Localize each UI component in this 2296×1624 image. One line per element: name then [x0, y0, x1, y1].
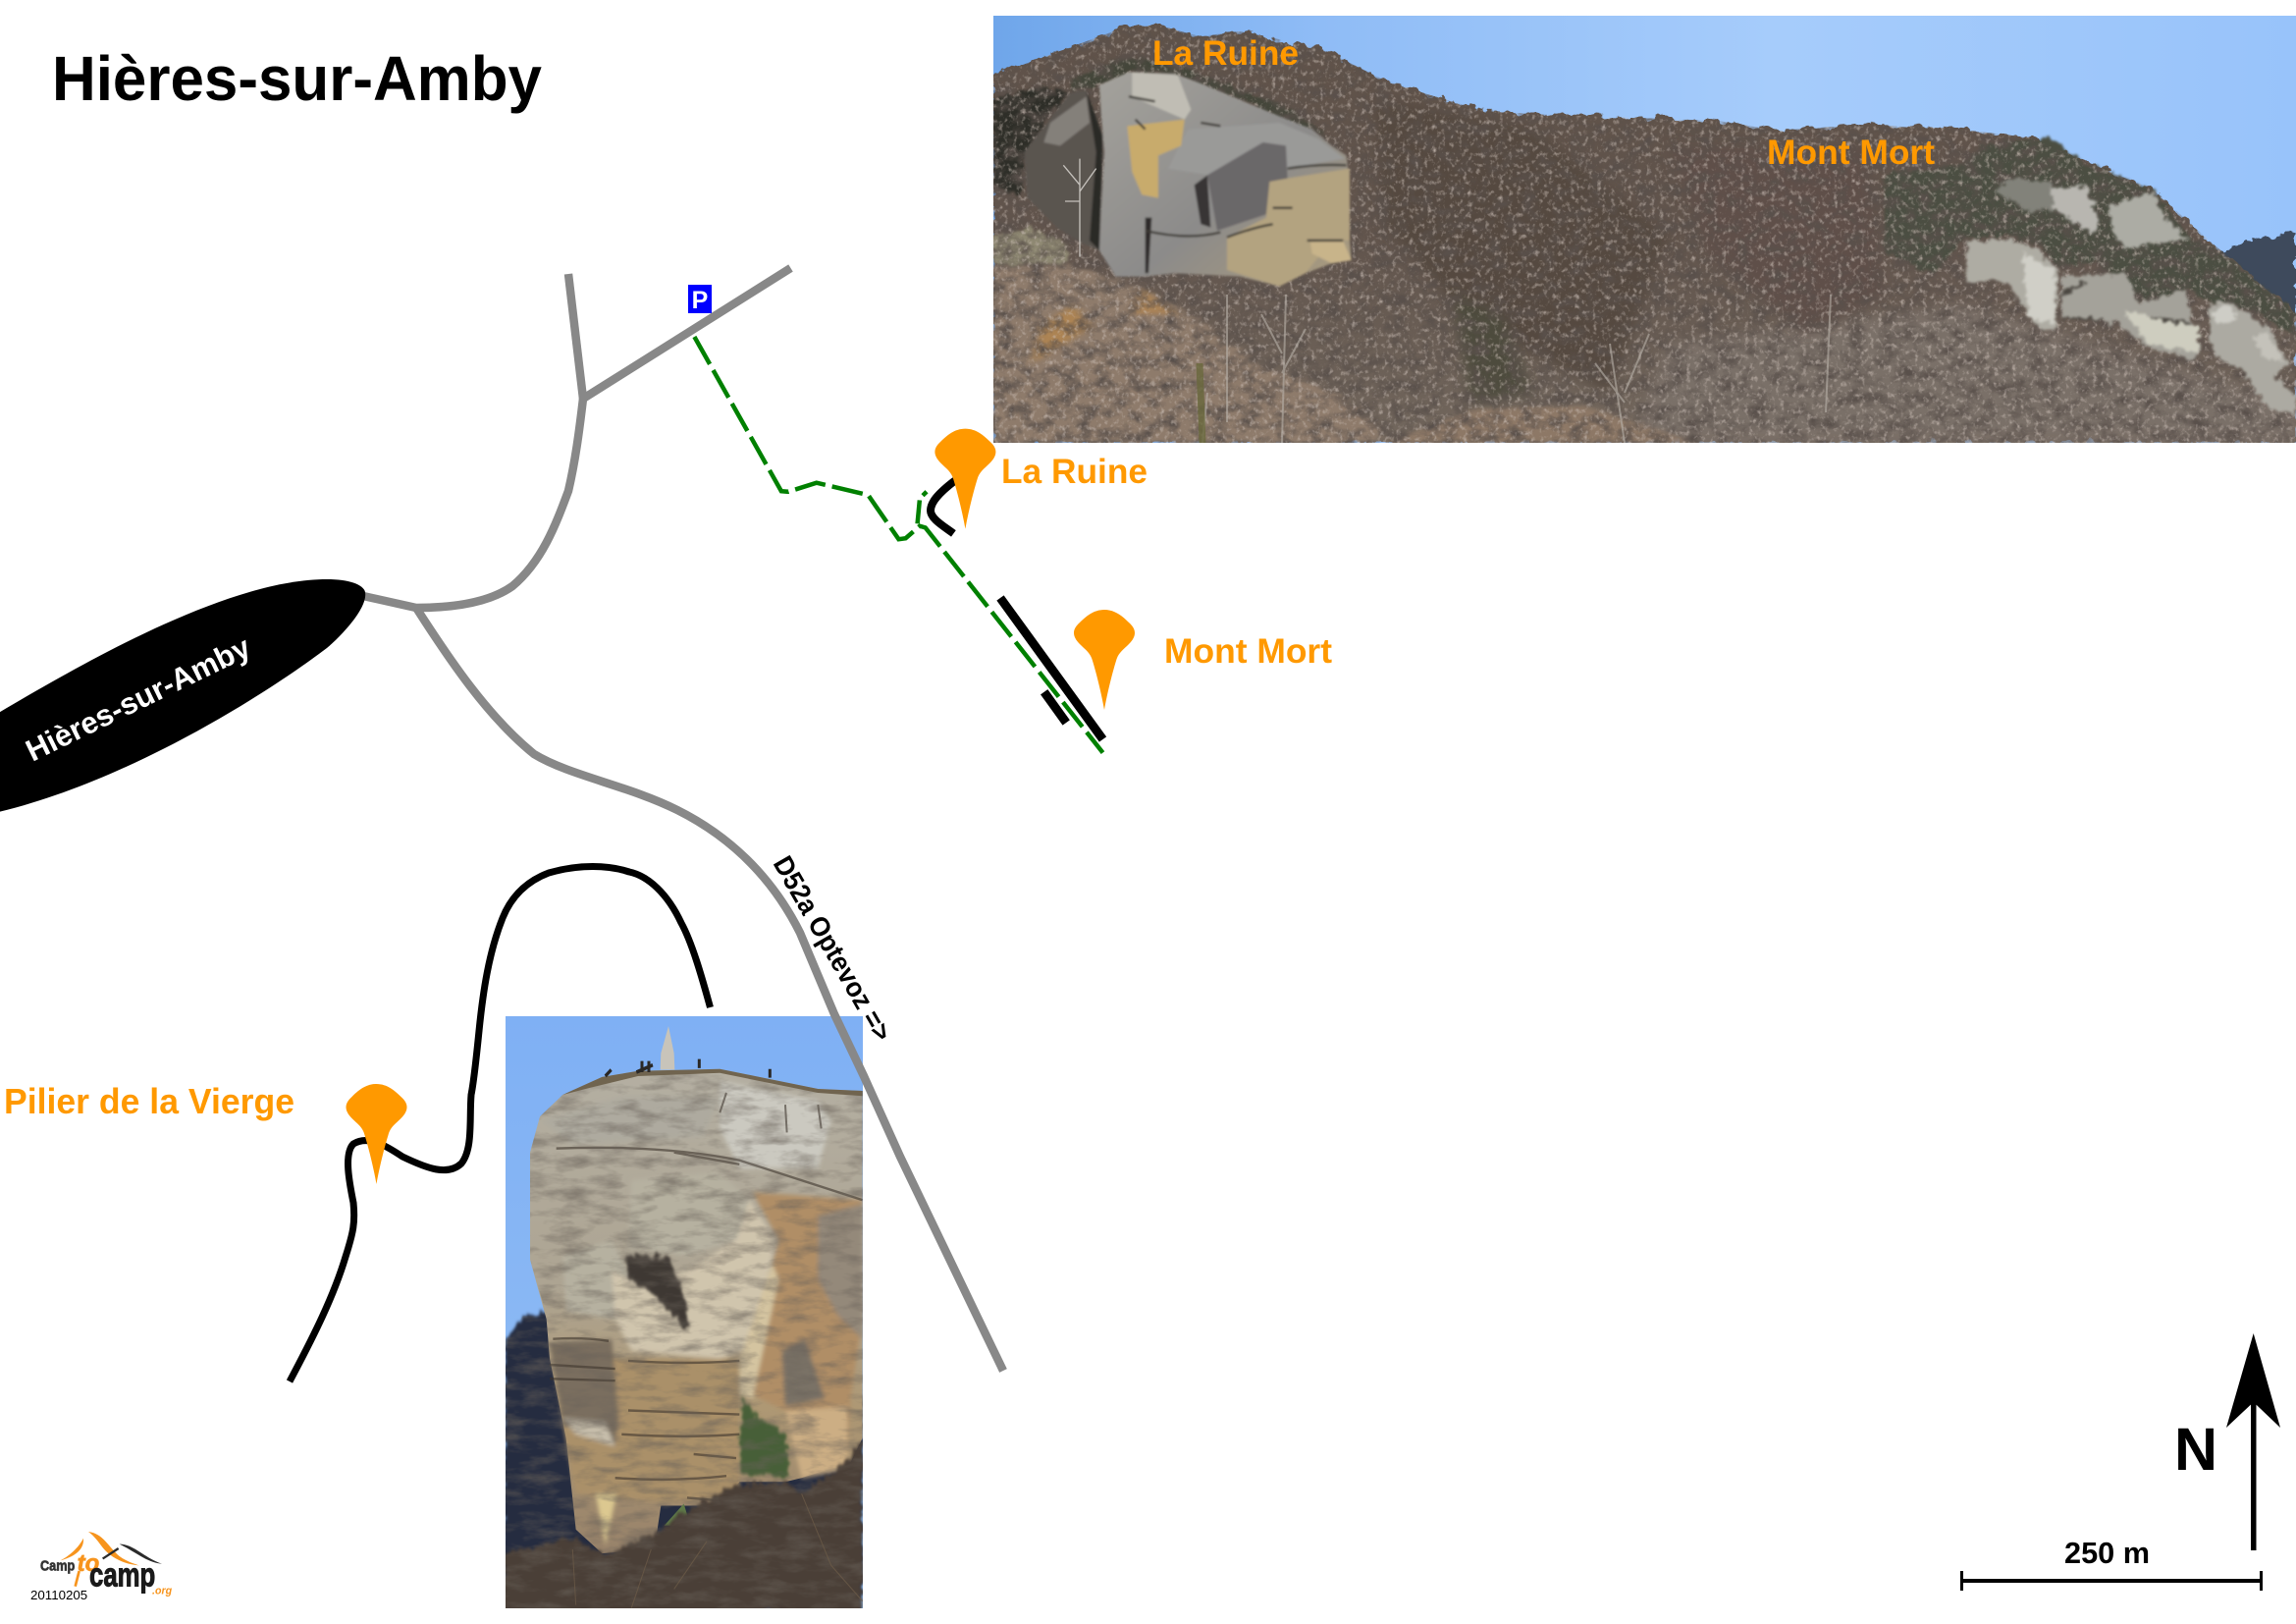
trees at the foot — [502, 1438, 863, 1613]
panel: photo of Pilier de la Vierge — [502, 1016, 863, 1613]
north arrow — [2174, 1333, 2280, 1550]
title: Hières-sur-Amby — [52, 43, 542, 114]
main trail — [694, 337, 1103, 753]
village name: Hières-sur-Amby — [21, 629, 256, 768]
dark canopy over the cliffs — [993, 57, 1332, 265]
approach path — [694, 337, 1103, 753]
road branch to north — [568, 274, 583, 399]
cliff: La Ruine — [1024, 72, 1352, 287]
marker: Pilier de la Vierge — [346, 1084, 406, 1184]
parking icon — [688, 285, 712, 314]
grassy summit — [562, 1069, 863, 1096]
orange mountain — [61, 1532, 139, 1565]
Camptocamp logo — [40, 1532, 173, 1597]
sky — [506, 1016, 863, 1608]
panel: panorama photo of La Ruine and Mont Mort — [993, 16, 2296, 443]
rock face — [530, 1069, 863, 1553]
canopy texture — [993, 16, 2296, 443]
road D52a — [416, 608, 1003, 1371]
scale bar: 250 m — [2064, 1537, 2150, 1570]
road network — [363, 268, 1003, 1371]
label: La Ruine: La Ruine — [1001, 453, 1148, 491]
to stem — [76, 1571, 80, 1587]
label: Pilier de la Vierge: Pilier de la Vierge — [4, 1081, 294, 1121]
photo label: La Ruine: La Ruine — [1152, 34, 1299, 73]
distant hill — [2220, 230, 2296, 314]
dark overhang — [625, 1256, 687, 1331]
road to parking — [583, 268, 791, 399]
bare trees — [1202, 295, 1831, 443]
date code: 20110205 — [30, 1588, 87, 1602]
to: to — [78, 1550, 99, 1577]
scree slope — [993, 265, 1694, 443]
rock texture — [506, 1016, 863, 1608]
road label: D52a Optevoz => — [768, 850, 898, 1047]
ivy on tree — [1200, 363, 1202, 443]
parking icon: P — [692, 287, 708, 314]
org: .org — [152, 1586, 173, 1597]
village blob — [0, 579, 365, 814]
wooded hillside — [993, 25, 2296, 443]
rock strata — [550, 1093, 863, 1502]
climbing site: La Ruine line — [931, 480, 955, 533]
scale bar — [1960, 1537, 2263, 1591]
bushes on the wall — [739, 1394, 790, 1478]
photo label: Mont Mort: Mont Mort — [1767, 134, 1935, 172]
Camp: Camp — [40, 1559, 75, 1575]
visitors — [606, 1059, 770, 1078]
climbing site: Mont Mort line — [1000, 598, 1103, 739]
background trees, dark left — [502, 1311, 863, 1613]
marker: Mont Mort — [1074, 610, 1135, 710]
branches — [572, 1493, 863, 1607]
north arrow: N — [2174, 1416, 2217, 1483]
marker: La Ruine — [934, 429, 995, 529]
forest tone patches — [1374, 98, 2296, 443]
road from village to junction — [363, 399, 583, 608]
branch to La Ruine — [918, 492, 927, 523]
climbing site: Mont Mort small sector — [1044, 692, 1066, 723]
sky — [993, 16, 2296, 443]
camp: camp — [89, 1557, 155, 1595]
monument on the summit — [661, 1026, 674, 1070]
rock colour masses — [540, 1081, 863, 1545]
black ridge — [102, 1544, 162, 1564]
cliffs: Mont Mort — [1966, 177, 2296, 415]
label: Mont Mort: Mont Mort — [1164, 632, 1332, 671]
climbing site: Pilier de la Vierge line — [290, 866, 711, 1381]
